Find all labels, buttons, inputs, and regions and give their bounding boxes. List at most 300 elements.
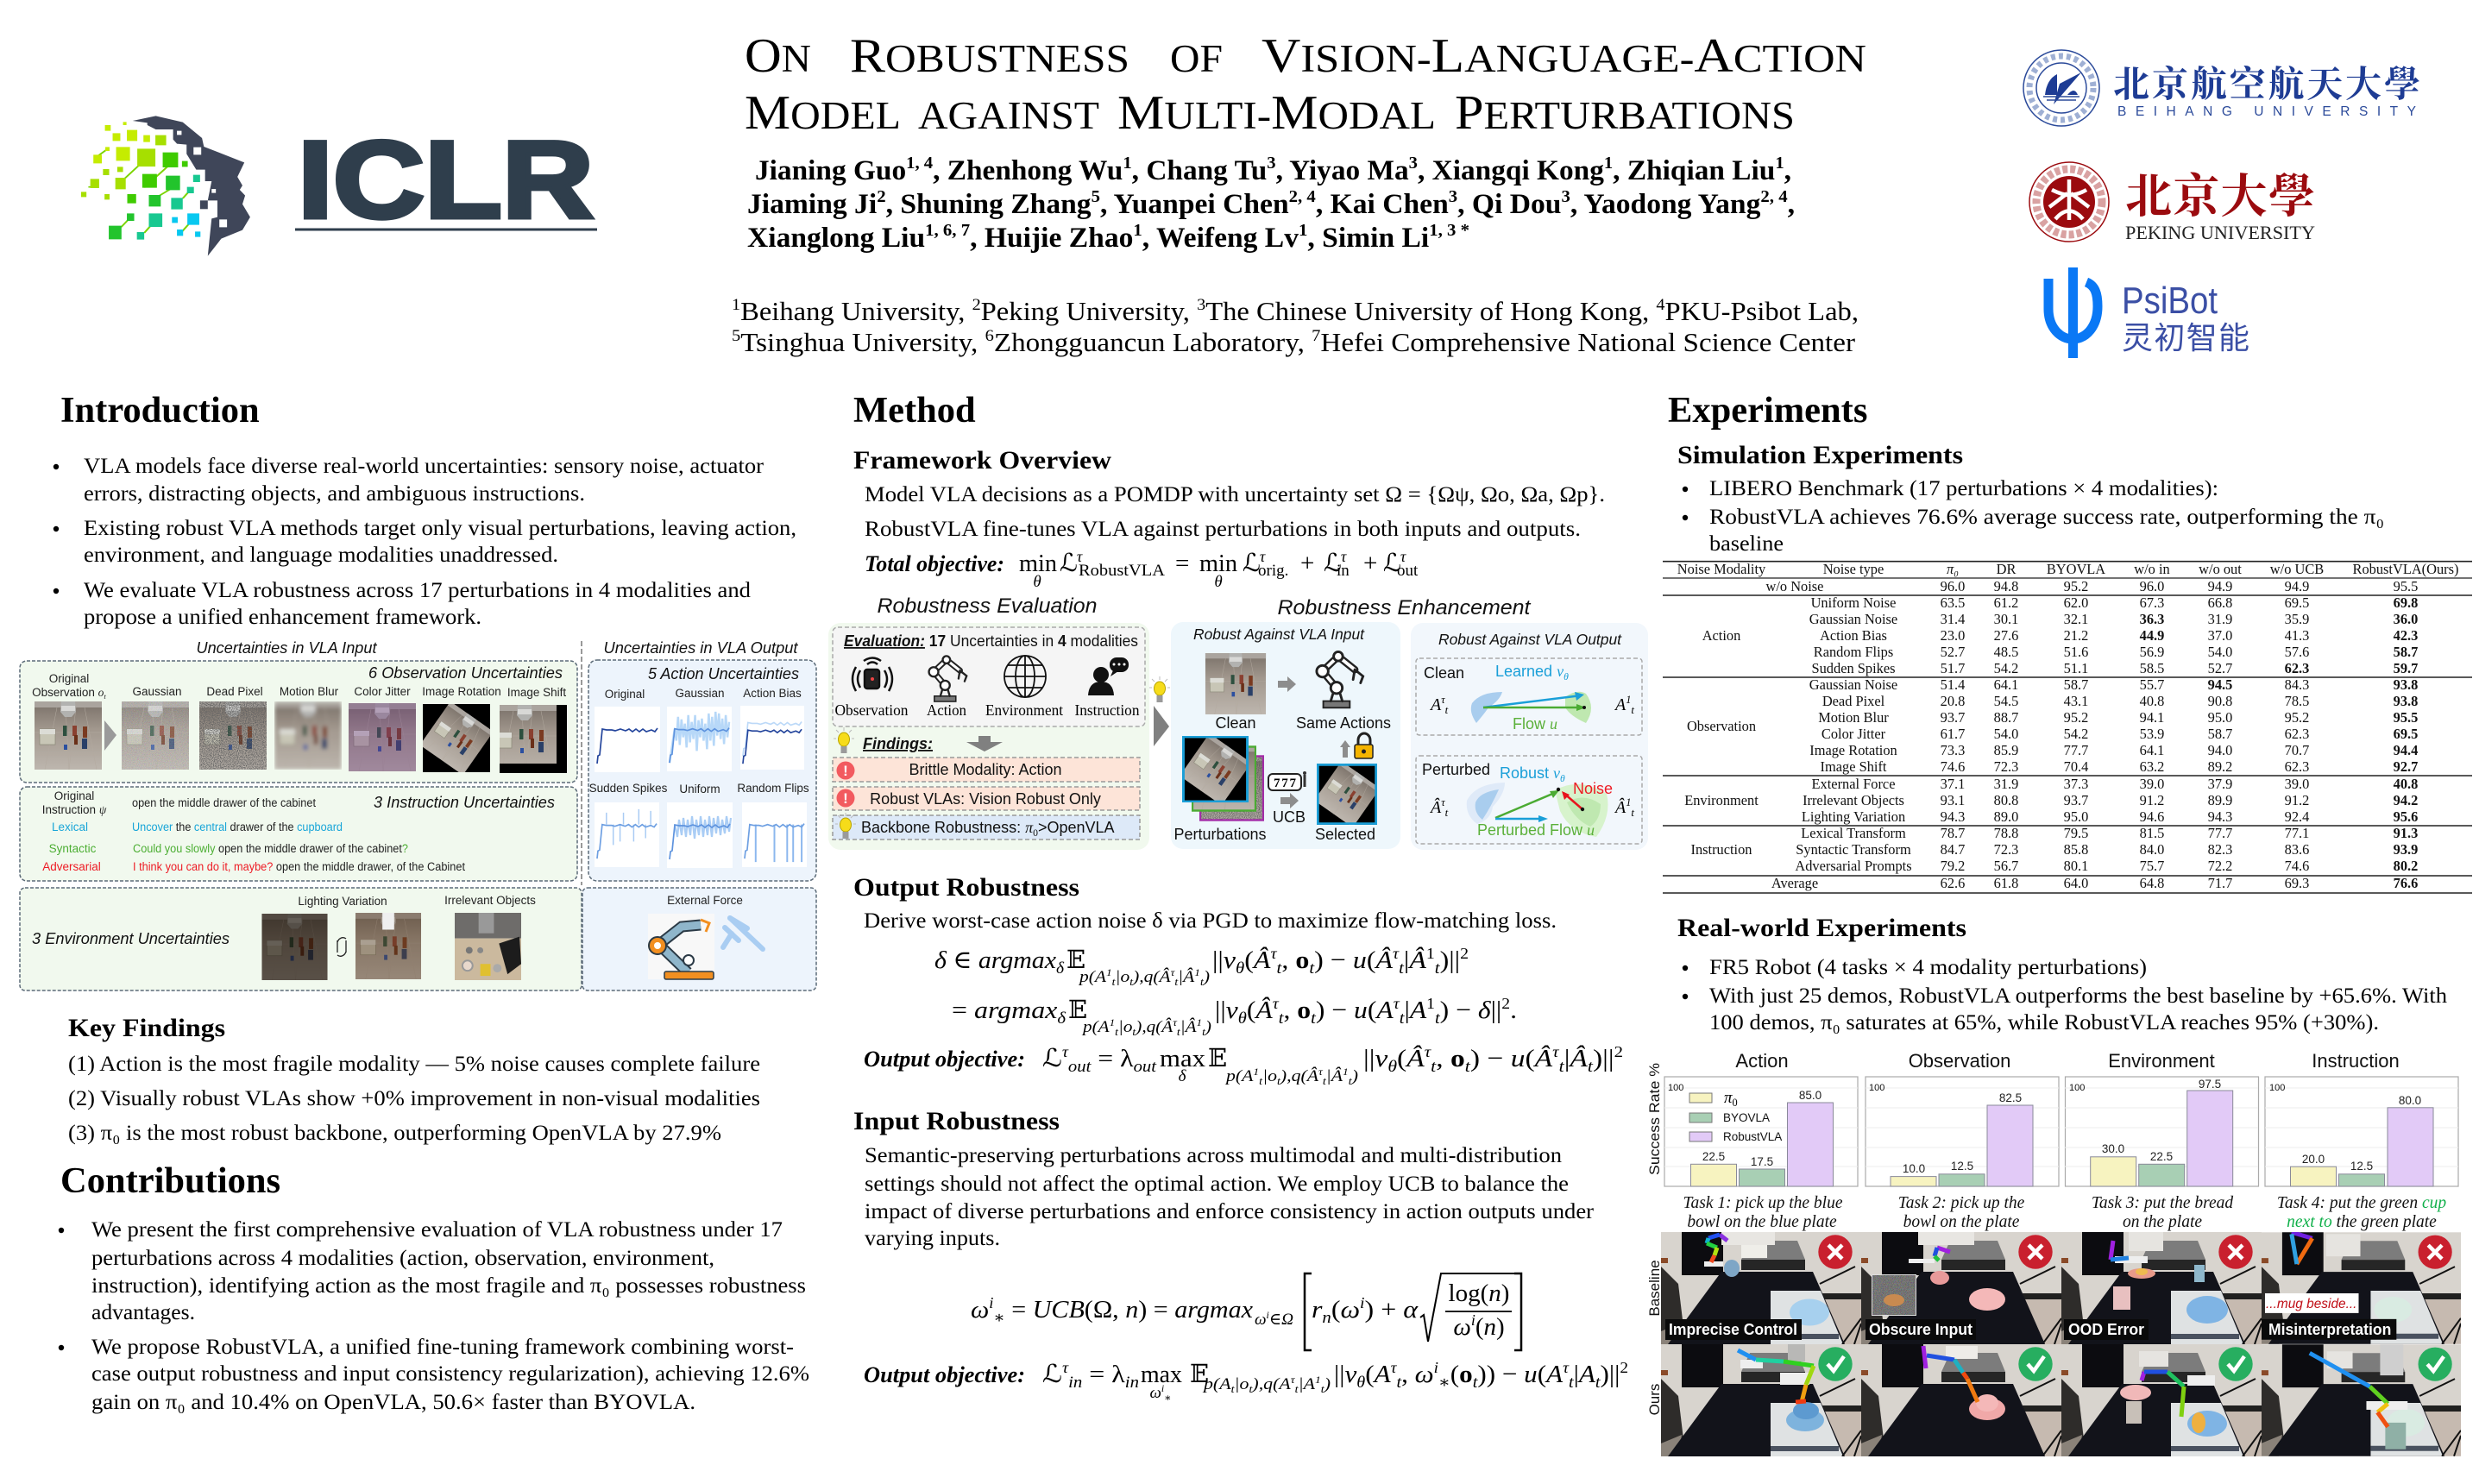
rows: instruction: 78.8 xyxy=(1994,825,2018,841)
rows: observation: Color Jitter xyxy=(1821,726,1886,742)
rows: environment: 31.9 xyxy=(1994,776,2018,792)
row: original xyxy=(42,789,316,816)
chart labels: Action Bias xyxy=(743,687,802,700)
affiliations xyxy=(732,296,1859,357)
rows: instruction: 72.3 xyxy=(1994,841,2018,858)
rows: action: 51.1 xyxy=(2064,660,2088,676)
rows: action: 44.9 xyxy=(2140,627,2164,644)
rows: action: 52.7 xyxy=(2208,660,2232,676)
text: real-world bullets: With just 25 demos, RobustVLA outperforms the best baseline by +65.6%. With xyxy=(1709,983,2447,1008)
equation: worst-case noise expanded: ||vθ(Âτt, ot) − u(Aτt|A1t) − δ||2. xyxy=(1215,995,1517,1028)
table header: w/o out xyxy=(2199,561,2242,577)
heading: Key Findings: Key Findings xyxy=(68,1014,225,1042)
chart: Action: 100 xyxy=(1668,1083,1683,1093)
figure: uncertainties xyxy=(20,638,816,990)
equation: total objective: θ xyxy=(1033,573,1041,591)
image: dead pixel xyxy=(199,701,267,770)
row: lexical: Lexical xyxy=(52,821,88,833)
icon: findings bulb xyxy=(834,727,854,753)
equation: output objective: δ xyxy=(1179,1067,1187,1085)
diagram: perturbed: Perturbed Flow u xyxy=(1477,821,1595,839)
icon: displaced arm xyxy=(723,918,763,949)
heading: Method: Method xyxy=(853,390,976,431)
equation: input objective: Output objective: xyxy=(864,1362,1025,1387)
image: gaussian xyxy=(122,701,189,770)
rows: instruction: Instruction xyxy=(1690,841,1752,858)
rows: observation: 43.1 xyxy=(2064,693,2088,709)
chart labels: Random Flips xyxy=(737,782,809,795)
finding: backbone xyxy=(833,813,1140,839)
rows: observation: Gaussian Noise xyxy=(1809,676,1897,693)
rows: environment: 92.4 xyxy=(2285,808,2309,825)
rows: observation: 58.7 xyxy=(2064,676,2088,693)
rows: action: 62.3 xyxy=(2285,660,2309,676)
heading: Simulation Experiments: Simulation Experiments xyxy=(1677,441,1963,469)
chart: Observation: 100 xyxy=(1869,1083,1884,1093)
rows: action: 51.7 xyxy=(1941,660,1965,676)
rows: environment: 93.7 xyxy=(2064,792,2088,808)
equation: input objective: p(A t|ot),q(A τt|A1t) xyxy=(1202,1374,1331,1395)
row: syntactic: Syntactic xyxy=(49,842,97,855)
row: average: 69.3 xyxy=(2285,875,2309,891)
photo: baseline task 2: Obscure Input xyxy=(1869,1320,1973,1338)
rows: observation: 54.5 xyxy=(1994,693,2018,709)
rows: action: 66.8 xyxy=(2208,594,2232,611)
bar values xyxy=(1702,1089,1821,1168)
equation: total objective: Total objective: xyxy=(865,551,1004,576)
logo underline xyxy=(295,228,597,231)
image: rotation xyxy=(423,704,490,772)
rows: observation: 73.3 xyxy=(1941,742,1965,758)
rows: instruction: 84.7 xyxy=(1941,841,1965,858)
equation: total objective: min xyxy=(1019,550,1057,577)
rows: action: Random Flips xyxy=(1814,644,1893,660)
text: real-world bullets: 100 demos, π₀ saturates at 65%, while RobustVLA reaches 95% (+30%). xyxy=(1709,1009,2379,1034)
text: framework overview: Model VLA decisions as a POMDP with uncertainty set Ω = {Ωψ, Ωo, Ωa, Ωp}. xyxy=(865,481,1605,506)
panel title: Robust Against VLA Output xyxy=(1438,631,1622,648)
row: lexical: Uncover the central drawer of the cupboard xyxy=(132,821,343,833)
diagram: perturbed: Â1t xyxy=(1614,796,1634,819)
rows: observation: 53.9 xyxy=(2140,726,2164,742)
diagram: perturbed: Âτt xyxy=(1429,796,1449,819)
rows: instruction: 78.7 xyxy=(1941,825,1965,841)
image labels: Image Shift xyxy=(507,686,566,699)
rows: environment: 91.2 xyxy=(2285,792,2309,808)
diagram: clean: Learned vθ xyxy=(1495,663,1569,682)
icon: environment xyxy=(1004,656,1046,697)
arrow: evaluation to enhancement xyxy=(1154,706,1169,746)
rows: instruction: 56.7 xyxy=(1994,858,2018,874)
text: introduction bullets: propose a unified enhancement framework. xyxy=(84,604,481,629)
text: real-world bullets xyxy=(1683,954,2447,1034)
label: External Force xyxy=(667,894,743,907)
text: real-world bullets: FR5 Robot (4 tasks × 4 modality perturbations) xyxy=(1709,954,2147,979)
rows: observation: 78.5 xyxy=(2285,693,2309,709)
image labels: Image Rotation xyxy=(422,685,501,698)
bar values: 30.0 xyxy=(2102,1142,2124,1155)
label: UCB: UCB xyxy=(1273,808,1306,826)
panel title: 5 Action Uncertainties xyxy=(648,664,799,682)
rows: action: Action xyxy=(1702,627,1740,644)
rows: observation: 95.5 xyxy=(2394,709,2418,726)
rows: environment: 37.9 xyxy=(2208,776,2232,792)
rows: observation: 95.2 xyxy=(2064,709,2088,726)
rows: action: 58.7 xyxy=(2394,644,2418,660)
icon: head silhouette with pixels xyxy=(81,116,250,256)
equation: total objective: out xyxy=(1397,562,1419,580)
rows: observation: 69.5 xyxy=(2394,726,2418,742)
task captions: Task 4: put the green cup xyxy=(2277,1194,2446,1212)
row: syntactic: Could you slowly open the middle drawer of the cabinet? xyxy=(133,842,408,855)
rows: environment: 95.6 xyxy=(2394,808,2418,825)
panel title: 3 Environment Uncertainties xyxy=(32,929,230,947)
rows: action: 58.5 xyxy=(2140,660,2164,676)
rows: observation: Dead Pixel xyxy=(1822,693,1885,709)
rows: instruction: Adversarial Prompts xyxy=(1795,858,1912,874)
text: input robustness xyxy=(865,1142,1595,1250)
rows: instruction: 79.2 xyxy=(1941,858,1965,874)
icon: robot arm xyxy=(1317,651,1363,707)
label: clean: Clean xyxy=(1215,714,1256,732)
logo: Peking University xyxy=(2029,160,2315,243)
title: ROBUSTNESS xyxy=(850,29,1129,83)
row: average: 64.0 xyxy=(2064,875,2088,891)
chart: Instruction xyxy=(2265,1050,2458,1186)
arrow: to actions xyxy=(1278,676,1296,692)
rows: observation: 70.7 xyxy=(2285,742,2309,758)
row: no noise: 94.8 xyxy=(1994,578,2018,594)
rows: environment: 89.9 xyxy=(2208,792,2232,808)
bar values: 82.5 xyxy=(1999,1091,2022,1104)
photo: baseline task 1 xyxy=(1661,1232,1861,1344)
photo: baseline task 2 xyxy=(1861,1232,2061,1344)
text: contributions bullets: instruction), identifying action as the most fragile and π₀ possesses robustness xyxy=(91,1273,806,1298)
rows: action: 63.5 xyxy=(1941,594,1965,611)
equation: input objective: ||vθ(Aτt, ωi∗(ot)) − u(Aτt|At)||2 xyxy=(1334,1359,1628,1392)
finding: robust VLAs: Robust VLAs: Vision Robust Only xyxy=(870,790,1101,808)
rows: observation: Motion Blur xyxy=(1818,709,1889,726)
bar values: 10.0 xyxy=(1903,1162,1925,1175)
rows: action: 36.0 xyxy=(2394,611,2418,627)
rows: action: 48.5 xyxy=(1994,644,2018,660)
task captions: Task 2: pick up the xyxy=(1898,1194,2025,1212)
text: input robustness: impact of diverse perturbations and enforce consistency in action outputs under xyxy=(865,1198,1595,1223)
equation: UCB: ωi(n) xyxy=(1453,1311,1505,1341)
bar values xyxy=(1903,1091,2022,1175)
equation: total objective: ℒτ xyxy=(1324,548,1347,577)
chart: uniform xyxy=(667,802,733,868)
text: contributions bullets: case output robustness and input consistency regularization), achieving 12.6% xyxy=(91,1361,809,1386)
equation: output objective: Output objective: xyxy=(864,1047,1025,1072)
rows: instruction: 79.5 xyxy=(2064,825,2088,841)
equation: worst-case noise expanded: 𝔼 xyxy=(1068,997,1087,1024)
chart: gaussian action xyxy=(667,707,732,771)
rows: observation: 54.0 xyxy=(1994,726,2018,742)
rows: environment: 94.3 xyxy=(2208,808,2232,825)
rows: observation: 54.2 xyxy=(2064,726,2088,742)
axis label: ours: Ours xyxy=(1646,1384,1663,1415)
rows: action: 41.3 xyxy=(2285,627,2309,644)
row: original: open the middle drawer of the cabinet xyxy=(132,796,316,809)
icon labels xyxy=(835,701,1139,719)
row: average: 76.6 xyxy=(2394,875,2418,891)
bars xyxy=(2290,1108,2433,1186)
equation: UCB: rn(ωi) + α xyxy=(1312,1294,1419,1327)
icon: action xyxy=(929,656,966,701)
bars xyxy=(2091,1091,2233,1186)
axis label: success rate: Success Rate % xyxy=(1646,1063,1663,1175)
text: key findings: (3) π₀ is the most robust backbone, outperforming OpenVLA by 27.9% xyxy=(68,1120,721,1145)
name in Chinese: 北京航空航天大學 xyxy=(2113,56,2420,108)
task captions: bowl on the plate xyxy=(1903,1213,2020,1231)
icon labels: Observation xyxy=(835,701,908,719)
text: introduction bullets: Existing robust VLA methods target only visual perturbations, leaving action, xyxy=(84,515,796,540)
bars xyxy=(1891,1105,2033,1186)
rows: environment: Lighting Variation xyxy=(1802,808,1905,825)
rows: observation: Observation xyxy=(1687,718,1756,734)
rows: environment: 37.3 xyxy=(2064,776,2088,792)
equation: UCB: log(n) xyxy=(1449,1280,1509,1307)
equation: worst-case noise expanded: = argmax δ xyxy=(952,997,1066,1028)
diagram: perturbed: Robust vθ xyxy=(1500,764,1565,784)
table header: BYOVLA xyxy=(2047,561,2105,577)
rows: action: 21.2 xyxy=(2064,627,2088,644)
text: introduction bullets xyxy=(53,453,796,629)
rows: action: Action Bias xyxy=(1820,627,1887,644)
labels: Lighting Variation xyxy=(298,895,387,908)
text: simulation bullets: RobustVLA achieves 76.6% average success rate, outperforming the π₀ xyxy=(1709,504,2384,529)
text: output robustness: Derive worst-case action noise δ via PGD to maximize flow-matching loss. xyxy=(864,908,1557,933)
diagram: clean: Flow u xyxy=(1513,715,1557,733)
chart: random flips xyxy=(742,802,807,867)
row: no noise: 95.5 xyxy=(2394,578,2418,594)
chart: Observation xyxy=(1866,1050,2059,1186)
rows: action: 32.1 xyxy=(2064,611,2088,627)
rows: action: Uniform Noise xyxy=(1811,594,1896,611)
affiliations: 1Beihang University, 2Peking University, 3The Chinese University of Hong Kong, 4PKU-Psibot Lab, xyxy=(732,296,1859,326)
rows: observation: 20.8 xyxy=(1941,693,1965,709)
rows: action: 59.7 xyxy=(2394,660,2418,676)
rows: observation: 74.6 xyxy=(1941,758,1965,775)
table header: Noise type xyxy=(1823,561,1884,577)
equation: input objective xyxy=(864,1359,1628,1404)
photo: baseline task 1: Imprecise Control xyxy=(1669,1320,1797,1338)
rows: action: 67.3 xyxy=(2140,594,2164,611)
rows: observation: 95.2 xyxy=(2285,709,2309,726)
finding: robust VLAs: ! xyxy=(843,790,848,807)
rows: environment: 89.0 xyxy=(1994,808,2018,825)
rows: environment: 80.8 xyxy=(1994,792,2018,808)
equation: total objective xyxy=(865,548,1419,591)
seal xyxy=(2029,162,2109,242)
PsiBot wordmark: PsiBot xyxy=(2122,280,2218,322)
photo: baseline task 4: ...mug beside... xyxy=(2266,1297,2356,1311)
rows: observation: 90.8 xyxy=(2208,693,2232,709)
logo: ICLR xyxy=(81,116,597,256)
rows: environment: 40.8 xyxy=(2394,776,2418,792)
chart labels: Sudden Spikes xyxy=(589,782,668,795)
row: no noise: 94.9 xyxy=(2208,578,2232,594)
chart labels: Uniform xyxy=(679,783,720,795)
rows: observation: 64.1 xyxy=(2140,742,2164,758)
rows: observation: Image Shift xyxy=(1821,758,1887,775)
bar values: 22.5 xyxy=(1702,1150,1725,1163)
text: contributions bullets: advantages. xyxy=(91,1299,195,1324)
equation: total objective: min xyxy=(1199,550,1237,577)
finding: brittle modality xyxy=(833,758,1140,782)
panel: robust against input xyxy=(1171,622,1400,849)
bar values: 17.5 xyxy=(1751,1155,1773,1168)
image labels: Gaussian xyxy=(132,685,182,698)
rows: environment: 94.6 xyxy=(2140,808,2164,825)
table header: DR xyxy=(1997,561,2016,577)
equation: total objective: RobustVLA xyxy=(1079,562,1165,580)
chart labels: Gaussian xyxy=(675,687,725,700)
finding: backbone: Backbone Robustness: π0>OpenVLA xyxy=(861,819,1115,839)
panel: evaluation xyxy=(828,623,1149,850)
panel: observation uncertainties xyxy=(20,661,577,783)
equation: output objective: max xyxy=(1160,1045,1206,1072)
rows: instruction: 74.6 xyxy=(2285,858,2309,874)
rows: environment: 39.0 xyxy=(2140,776,2164,792)
rows: environment: 37.1 xyxy=(1941,776,1965,792)
text: contributions bullets: gain on π₀ and 10.4% on OpenVLA, 50.6× faster than BYOVLA. xyxy=(91,1389,695,1414)
bar values: 97.5 xyxy=(2199,1078,2221,1091)
text: introduction bullets: environment, and language modalities unaddressed. xyxy=(84,542,558,567)
rows: action: 42.3 xyxy=(2394,627,2418,644)
equation: input objective: max xyxy=(1141,1361,1182,1388)
image stack: perturbations xyxy=(1180,733,1264,821)
chart: Action: Action xyxy=(1735,1050,1789,1072)
icon: robot arm xyxy=(648,914,714,979)
rows: action xyxy=(1702,594,2418,676)
bar values: 22.5 xyxy=(2150,1150,2173,1163)
heading: uncertainties in VLA input: Uncertainties in VLA Input xyxy=(197,638,377,657)
equation: worst-case noise: ||vθ(Âτt, ot) − u(Âτt|Â1t)||2 xyxy=(1212,945,1469,978)
equation: total objective: ℒτ xyxy=(1243,548,1266,577)
label: perturbations: Perturbations xyxy=(1173,826,1267,843)
photo: baseline task 4: Misinterpretation xyxy=(2268,1320,2391,1338)
icon: observation xyxy=(853,657,892,691)
equation: total objective: ℒτ xyxy=(1060,548,1083,577)
text: input robustness: Semantic-preserving perturbations across multimodal and multi-distribution xyxy=(865,1142,1562,1167)
panel title: 3 Instruction Uncertainties xyxy=(374,793,555,811)
photo: ours task 2 xyxy=(1861,1344,2061,1456)
rows: instruction: 77.1 xyxy=(2285,825,2309,841)
image: color jitter xyxy=(349,703,416,771)
diagram: perturbed xyxy=(1416,756,1642,844)
chart labels xyxy=(589,687,809,795)
title: ON xyxy=(745,29,811,83)
text: key findings: (2) Visually robust VLAs show +0% improvement in non-visual modalities xyxy=(68,1085,760,1110)
rows: environment: 93.1 xyxy=(1941,792,1965,808)
rows: instruction: 84.0 xyxy=(2140,841,2164,858)
heading: Output Robustness: Output Robustness xyxy=(853,873,1079,902)
arrow: up xyxy=(1340,740,1350,758)
equation: UCB: ωi∈Ω xyxy=(1255,1310,1293,1329)
legend: RobustVLA xyxy=(1723,1130,1782,1143)
rows: observation: 62.3 xyxy=(2285,726,2309,742)
rows: instruction: 80.2 xyxy=(2394,858,2418,874)
diagram: clean: A1t xyxy=(1614,694,1634,716)
authors: Xianglong Liu1, 6, 7, Huijie Zhao1, Weifeng Lv1, Simin Li1, 3 * xyxy=(747,221,1469,254)
table header: RobustVLA(Ours) xyxy=(2353,561,2458,577)
rows: action: 51.6 xyxy=(2064,644,2088,660)
image labels: Dead Pixel xyxy=(206,685,263,698)
heading: Framework Overview: Framework Overview xyxy=(853,446,1111,475)
image: dark lighting xyxy=(261,914,328,980)
image labels: Observation ot xyxy=(32,686,106,701)
heading: Introduction: Introduction xyxy=(60,390,260,431)
rows: observation: 94.5 xyxy=(2208,676,2232,693)
equation: total objective: orig. xyxy=(1258,562,1288,580)
text: framework overview: RobustVLA fine-tunes VLA against perturbations in both inputs and outputs. xyxy=(865,516,1581,541)
text: key findings xyxy=(68,1051,760,1145)
rows: action: 54.2 xyxy=(1994,660,2018,676)
rows: observation: 93.8 xyxy=(2394,676,2418,693)
rows: observation: 64.1 xyxy=(1994,676,2018,693)
rows: action: 56.9 xyxy=(2140,644,2164,660)
rows: action: 57.6 xyxy=(2285,644,2309,660)
table header: w/o in xyxy=(2134,561,2170,577)
equation: input objective: 𝔼 xyxy=(1190,1361,1209,1388)
row: adversarial: Adversarial xyxy=(42,860,101,873)
chart: Action xyxy=(1664,1050,1858,1186)
equation: total objective: = xyxy=(1175,550,1189,577)
finding: brittle modality: Brittle Modality: Action xyxy=(909,761,1062,778)
rows: instruction: Syntactic Transform xyxy=(1796,841,1911,858)
image labels: Color Jitter xyxy=(354,685,411,698)
rows: observation: 63.2 xyxy=(2140,758,2164,775)
seal xyxy=(2023,50,2099,126)
rows: action: 69.8 xyxy=(2394,594,2418,611)
text: contributions bullets: We present the first comprehensive evaluation of VLA robustness under 17 xyxy=(91,1217,783,1242)
arrow: down xyxy=(966,736,1003,751)
row: no noise: 94.9 xyxy=(2285,578,2309,594)
rows: instruction: 93.9 xyxy=(2394,841,2418,858)
photo: baseline task 3 xyxy=(2061,1232,2262,1344)
icon: cycle xyxy=(337,938,346,956)
bar values: 12.5 xyxy=(1951,1160,1973,1173)
rows: environment: Irrelevant Objects xyxy=(1803,792,1904,808)
equation: total objective: + xyxy=(1363,550,1377,577)
rows: environment: External Force xyxy=(1812,776,1895,792)
table header: π₀ xyxy=(1947,561,1959,577)
rows: instruction xyxy=(1690,825,2418,874)
rows: action: 62.0 xyxy=(2064,594,2088,611)
rows: environment: 91.2 xyxy=(2140,792,2164,808)
chart: Environment: Environment xyxy=(2108,1050,2215,1072)
affiliations: 5Tsinghua University, 6Zhongguancun Laboratory, 7Hefei Comprehensive National Science Center xyxy=(732,327,1855,357)
chart: sudden spikes xyxy=(595,802,659,867)
chart: Instruction: Instruction xyxy=(2312,1050,2400,1072)
axis label: baseline: Baseline xyxy=(1646,1260,1663,1317)
equation: worst-case noise: 𝔼 xyxy=(1066,946,1085,974)
chart labels: Original xyxy=(605,688,645,701)
equation: input objective: ℒτin = λin xyxy=(1042,1359,1139,1392)
bar values xyxy=(2102,1078,2221,1163)
rows: instruction: 72.2 xyxy=(2208,858,2232,874)
chart: Environment xyxy=(2065,1050,2259,1186)
Chinese wordmark: 灵初智能 xyxy=(2122,313,2249,358)
labels: Irrelevant Objects xyxy=(444,894,536,907)
text: input robustness: settings should not affect the optimal action. We employ UCB to balance the xyxy=(865,1171,1569,1196)
rows: observation: 93.7 xyxy=(1941,709,1965,726)
bar values: 20.0 xyxy=(2302,1153,2325,1166)
image labels: Motion Blur xyxy=(280,685,339,698)
task captions: Task 1: pick up the blue xyxy=(1683,1194,1843,1212)
text: introduction bullets: VLA models face diverse real-world uncertainties: sensory noise, actuator xyxy=(84,453,764,478)
